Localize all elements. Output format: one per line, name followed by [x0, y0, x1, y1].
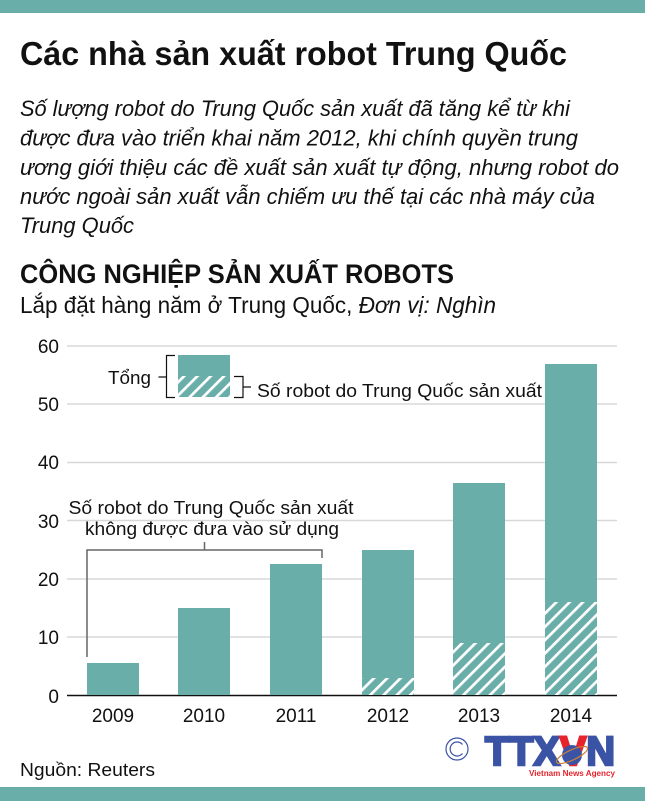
bar chart: [38, 337, 617, 727]
title: Các nhà sản xuất robot Trung Quốc: [20, 35, 567, 72]
x axis labels: 2011: [276, 706, 316, 727]
intro text block: ương giới thiệu các đề xuất sản xuất tự động, nhưng robot do: [20, 155, 619, 180]
y axis labels: 50: [38, 395, 59, 416]
x axis labels: 2010: [183, 706, 225, 727]
legend bracket: made in China: [234, 376, 251, 398]
legend swatch: [178, 355, 230, 397]
logo: TTXVN: [446, 728, 615, 778]
x axis labels: [92, 706, 593, 727]
annotation text: Số robot do Trung Quốc sản xuất: [68, 498, 354, 518]
x axis labels: 2009: [92, 706, 134, 727]
y axis labels: [38, 337, 59, 708]
bar 2009: [87, 663, 139, 695]
logo tagline: Vietnam News Agency: [529, 768, 615, 778]
intro text block: [20, 96, 619, 238]
legend label: made in China: Số robot do Trung Quốc sản xuất: [257, 381, 542, 401]
y axis labels: 60: [38, 337, 59, 358]
x axis labels: 2012: [367, 706, 409, 727]
annotation bracket: [87, 542, 322, 657]
annotation text: không được đưa vào sử dụng: [85, 519, 339, 539]
intro text block: Số lượng robot do Trung Quốc sản xuất đã tăng kể từ khi: [20, 96, 571, 121]
x axis labels: 2013: [458, 706, 500, 727]
intro text block: nước ngoài sản xuất vẫn chiếm ưu thế tại các nhà máy của: [20, 184, 595, 209]
chart heading: CÔNG NGHIỆP SẢN XUẤT ROBOTS: [20, 259, 454, 289]
logo globe: [562, 745, 582, 765]
legend label: total: Tổng: [108, 368, 151, 388]
bar 2010: [178, 608, 230, 695]
legend bracket: total: [158, 356, 175, 398]
bar 2012: [362, 550, 414, 695]
y axis labels: 40: [38, 453, 59, 474]
y axis labels: 30: [38, 512, 59, 533]
bar 2011: [270, 564, 322, 695]
y axis labels: 10: [38, 628, 59, 649]
bar 2013: [453, 483, 505, 695]
legend: [108, 355, 542, 401]
logo orbit: [554, 743, 590, 767]
annotation: unused Chinese robots: [68, 498, 354, 657]
intro text block: Trung Quốc: [20, 213, 134, 238]
grid lines: [67, 346, 617, 637]
y axis labels: 0: [48, 687, 59, 708]
source: Nguồn: Reuters: [20, 760, 155, 780]
bottom band: [0, 787, 645, 801]
baseline axis: [67, 694, 617, 696]
bar 2014: [545, 364, 597, 695]
chart subtitle: Lắp đặt hàng năm ở Trung Quốc, Đơn vị: Nghìn: [20, 292, 496, 318]
top band: [0, 0, 645, 13]
y axis labels: 20: [38, 570, 59, 591]
icon: copyright: [446, 738, 468, 760]
logo letters: TTXVN: [485, 728, 615, 774]
x axis labels: 2014: [550, 706, 593, 727]
annotation text: [68, 498, 354, 539]
intro text block: được đưa vào triển khai năm 2012, khi chính quyền trung: [20, 126, 578, 150]
